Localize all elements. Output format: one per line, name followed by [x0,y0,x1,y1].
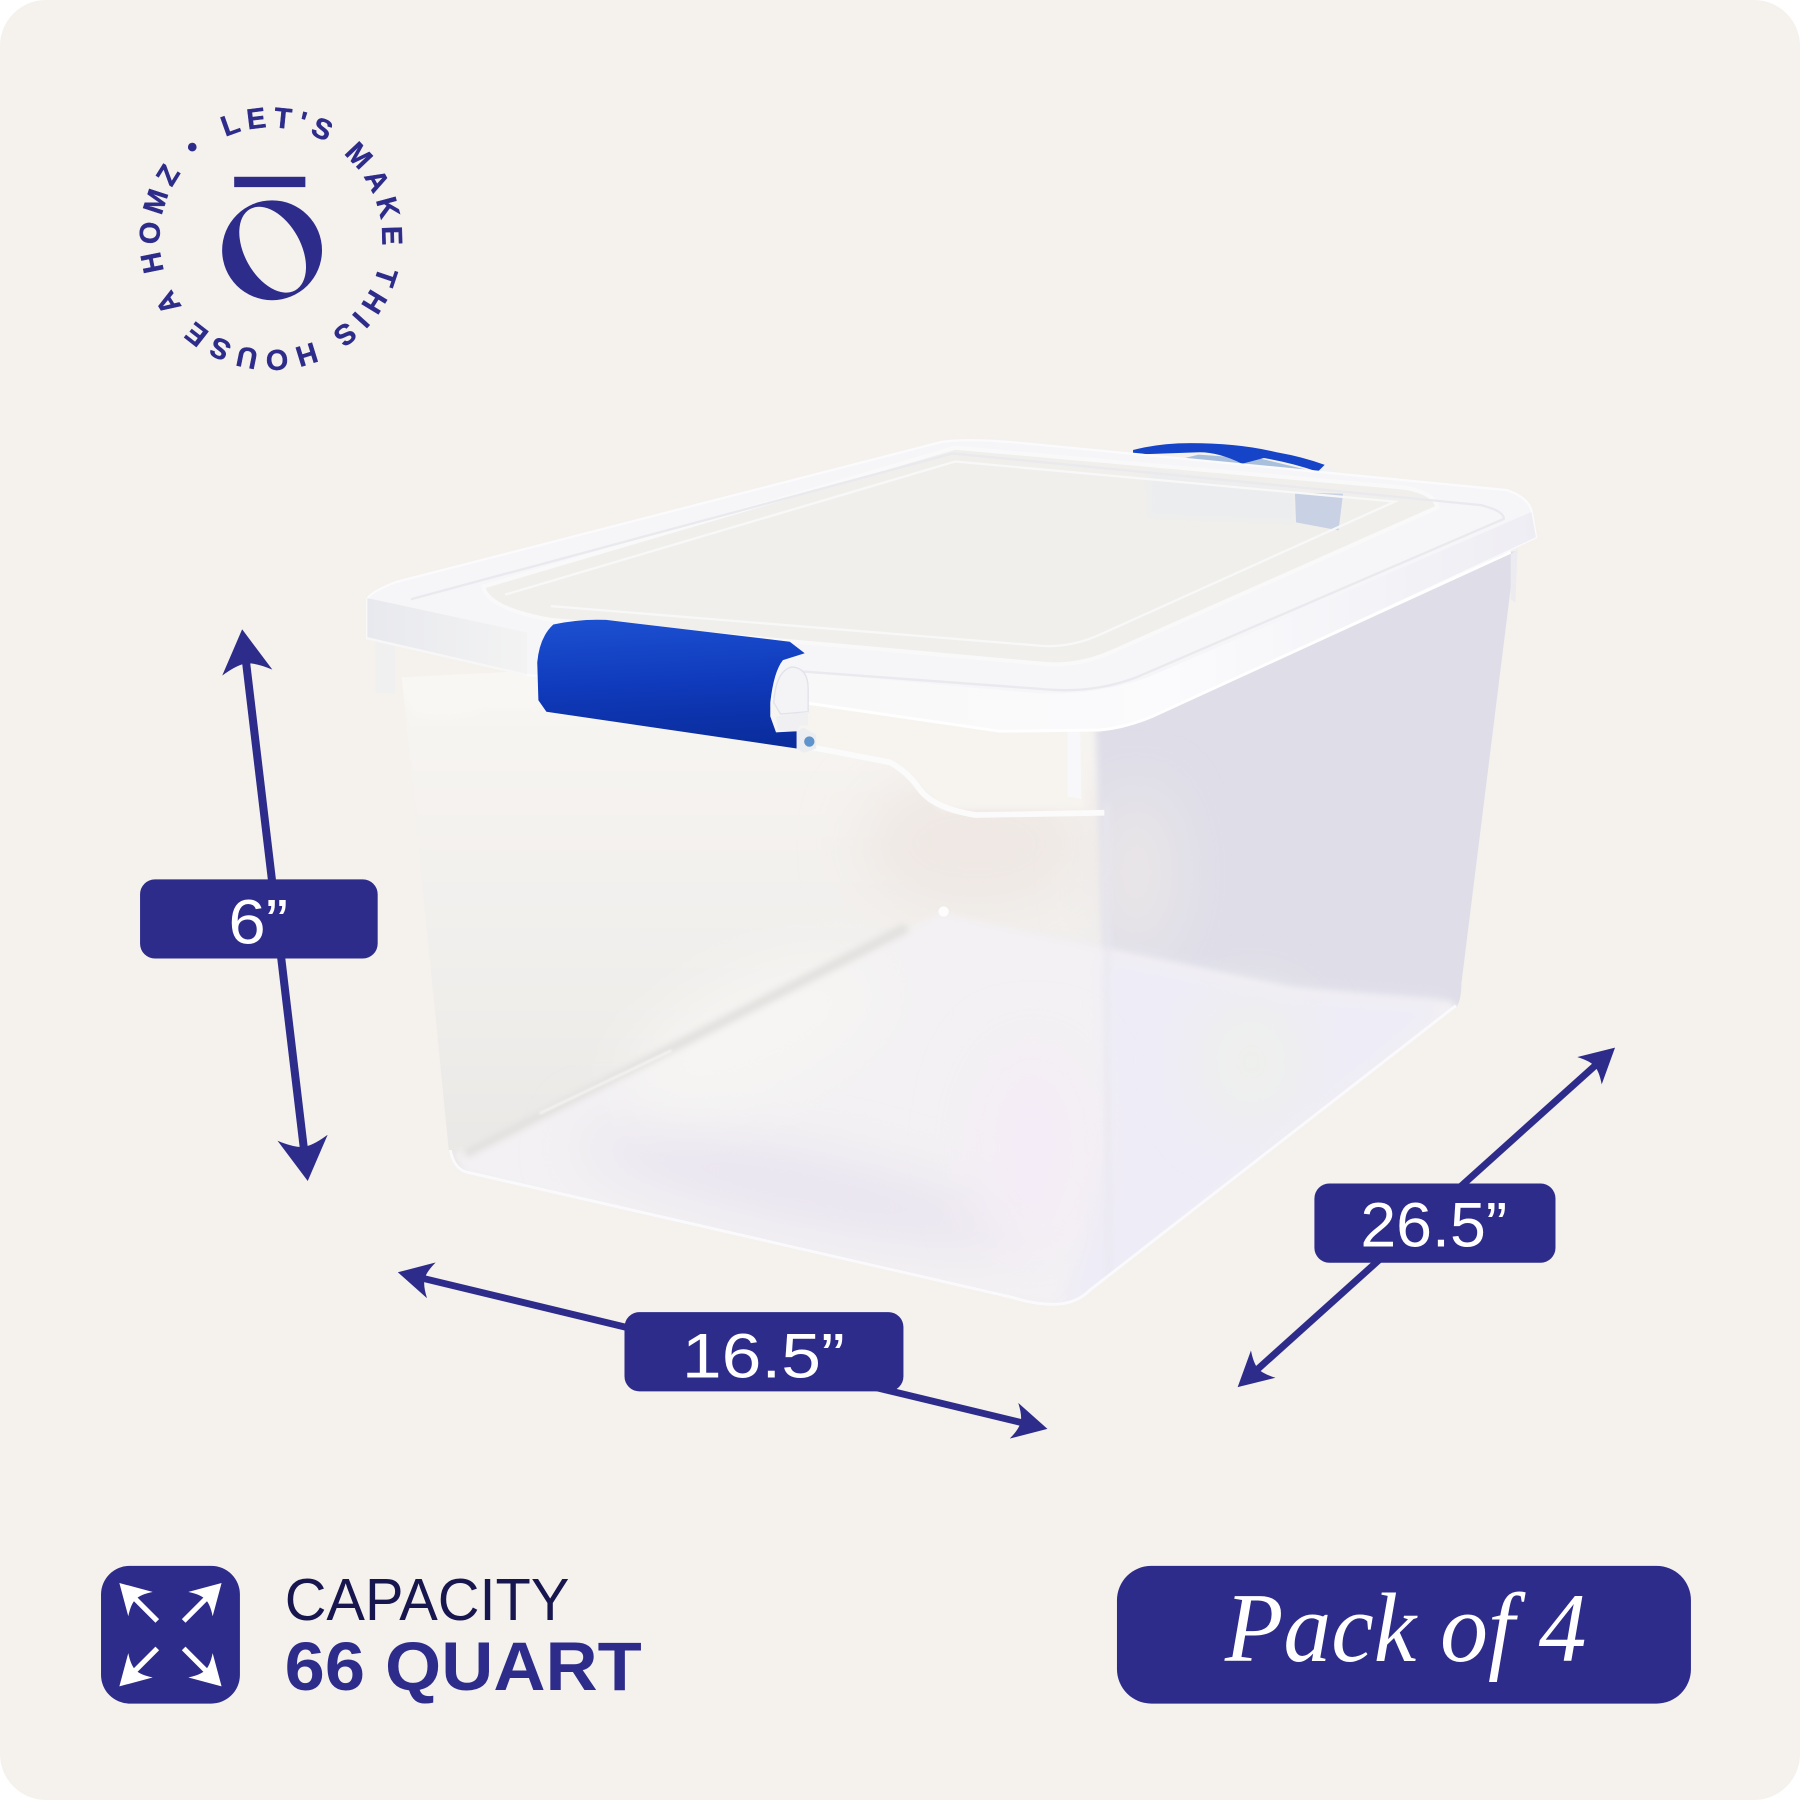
carry handle notch [806,746,1104,815]
dimension: length 26.5 inches: 26.5” [1360,1191,1507,1261]
dimension: width 16.5 inches: 16.5” [682,1322,845,1392]
right lid tab [1511,549,1518,603]
front blue latch [537,620,816,753]
dimension: height 6 inches [140,659,378,1151]
latch hinge [774,667,816,753]
width arrow [420,1278,1025,1423]
capacity heading: CAPACITY [285,1566,569,1633]
length label [1314,1184,1555,1263]
tub lid [367,440,1536,731]
dimension: width 16.5 inches [420,1278,1025,1423]
logo badge [139,107,402,370]
tub body [444,551,1514,1306]
pack of 4 badge [1117,1566,1691,1704]
circular tagline: LET'S MAKE THIS HOUSE A HOMZ • [139,107,402,370]
lid top surface [367,440,1536,731]
front-right lid band [804,512,1536,731]
logo mark [222,177,322,304]
capacity value: 66 QUART [285,1628,642,1705]
height label [140,879,378,959]
capacity text [285,1566,642,1705]
back blue latch [1133,443,1343,482]
front-left lid band [367,598,527,675]
handle post [1068,730,1081,799]
left lid tab [375,641,395,693]
dimension: length 26.5 inches [1255,1063,1598,1372]
length arrow [1255,1063,1598,1372]
handle seen through lid [1295,492,1343,530]
width label [624,1312,903,1391]
plastic storage tub [367,440,1538,1320]
height arrow [246,659,304,1151]
pack of 4 badge: Pack of 4 [1224,1574,1586,1683]
capacity icon [101,1566,240,1704]
dimension: height 6 inches: 6” [228,888,288,958]
lid raised rim lines [483,448,1437,664]
